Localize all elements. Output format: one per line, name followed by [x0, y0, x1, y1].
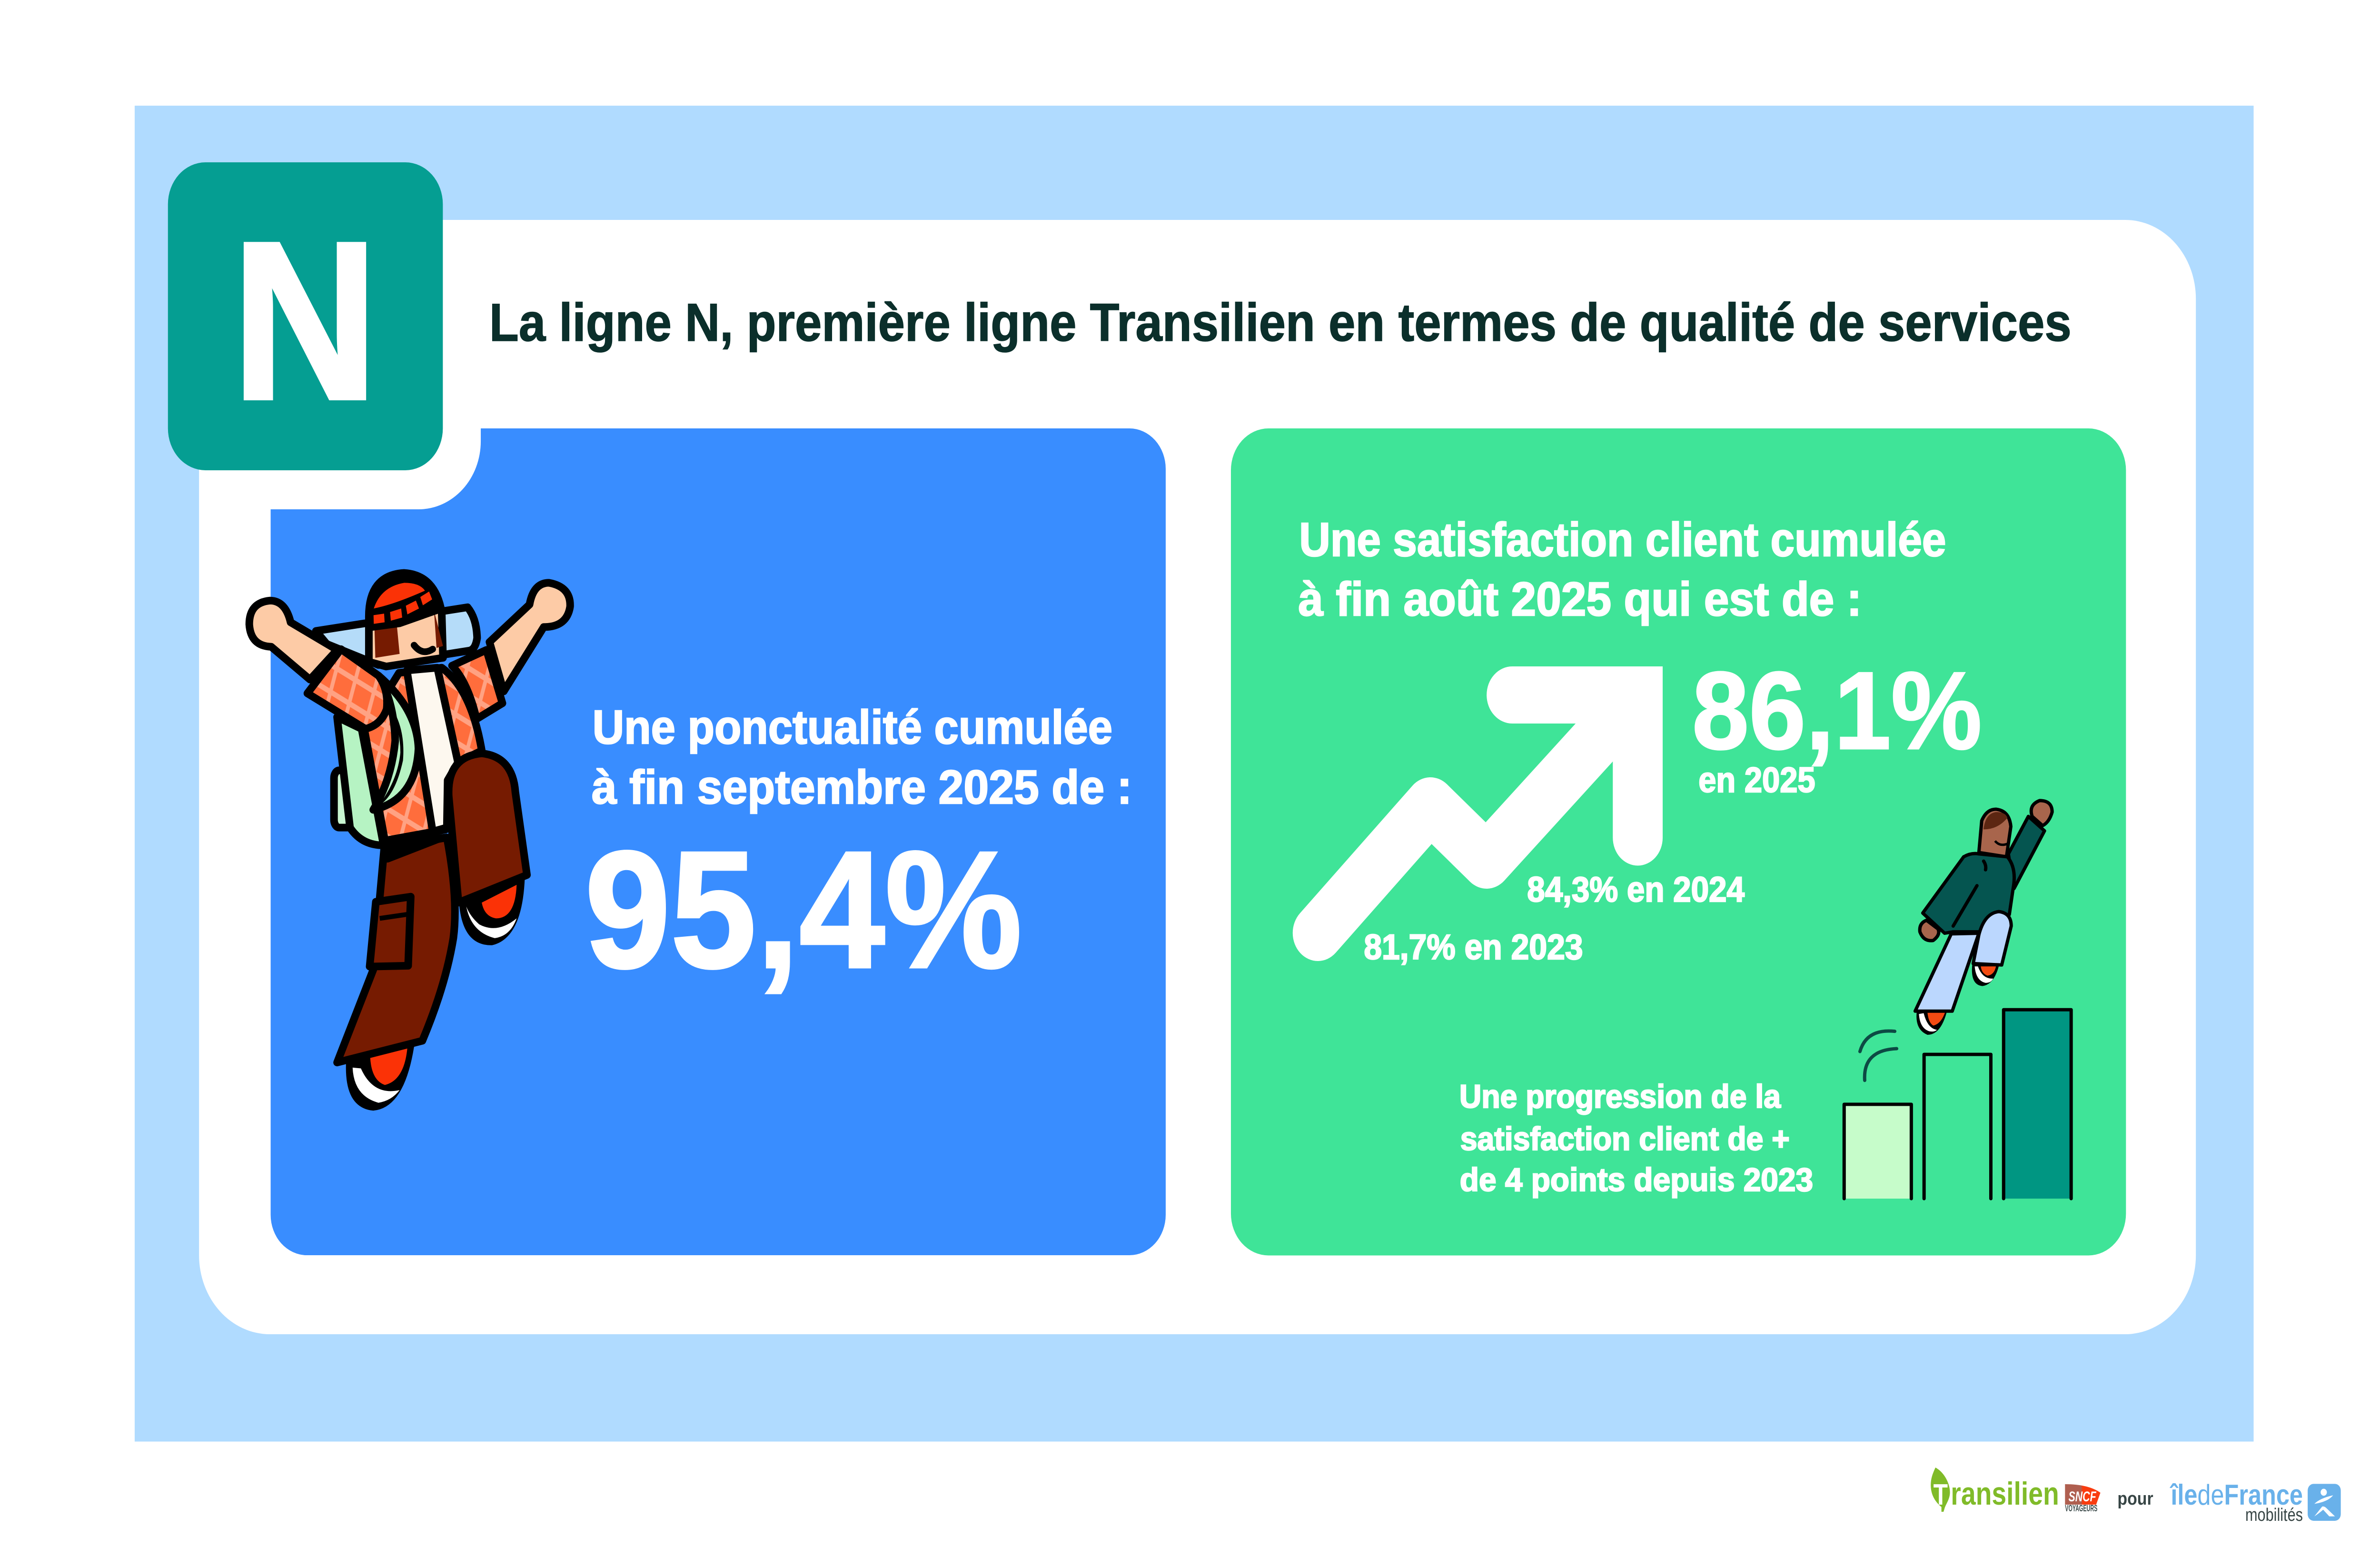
bar 2023 [1844, 1104, 1911, 1199]
backpack strap [373, 675, 418, 810]
strap shadow [378, 707, 403, 806]
motion lines [1860, 1031, 1897, 1081]
icon: rising arrow [1318, 666, 1663, 933]
satisfaction heading [1298, 513, 1946, 626]
raised knee [448, 754, 527, 902]
value 2025: 86,1% [1692, 649, 1982, 773]
leaf [1931, 1468, 1950, 1512]
logo: Île-de-France Mobilités [2170, 1479, 2341, 1525]
punctuality heading: à fin septembre 2025 de : [592, 761, 1132, 814]
text: pour: pour [2117, 1488, 2153, 1508]
left arm [249, 601, 337, 680]
logo: SNCF Voyageurs: SNCF [2068, 1489, 2096, 1505]
panel: punctuality [271, 428, 1166, 1255]
bar 2025 [2003, 1010, 2071, 1199]
head [1979, 809, 2011, 857]
rolled mat [316, 607, 477, 665]
backpack pocket [334, 770, 355, 828]
head [369, 573, 443, 666]
main leg [337, 837, 455, 1062]
progression text [1459, 1078, 1813, 1198]
logo: Transilien [1931, 1468, 2059, 1512]
right sleeve [452, 650, 503, 719]
mobilités: mobilités [2245, 1504, 2303, 1525]
logo: SNCF Voyageurs: VOYAGEURS [2065, 1503, 2097, 1513]
illustration: jumping traveller with backpack [249, 573, 570, 1111]
waistband [382, 833, 447, 863]
shoe upper [459, 875, 525, 945]
bar 2024 [1924, 1054, 1991, 1199]
white T: T [1934, 1478, 1948, 1511]
bar chart with jumper [1844, 801, 2071, 1199]
punctuality value: 95,4% [585, 817, 1022, 1003]
icon: runner [2308, 1484, 2341, 1521]
left sleeve [307, 649, 387, 729]
wordmark: îledeFrance [2170, 1479, 2303, 1511]
punctuality heading [592, 701, 1132, 814]
progression text: Une progression de la [1459, 1078, 1781, 1115]
logo: SNCF Voyageurs [2065, 1484, 2101, 1513]
shoe lower [1916, 1012, 1947, 1035]
wordmark: ransilien [1951, 1476, 2059, 1512]
right arm [489, 583, 570, 691]
line badge N: N [232, 195, 378, 446]
t-shirt [407, 668, 458, 832]
raised arm [2008, 801, 2052, 889]
progression text: satisfaction client de + [1460, 1121, 1790, 1157]
shirt [364, 668, 482, 841]
label 2025: en 2025 [1698, 760, 1815, 800]
progression text: de 4 points depuis 2023 [1460, 1161, 1813, 1198]
long leg [1915, 933, 1979, 1011]
line badge N [168, 162, 443, 470]
satisfaction heading: Une satisfaction client cumulée [1299, 513, 1946, 566]
label 2024: 84,3% en 2024 [1527, 870, 1745, 909]
satisfaction heading: à fin août 2025 qui est de : [1298, 573, 1862, 626]
label 2023: 81,7% en 2023 [1364, 927, 1583, 967]
backpack [337, 717, 384, 845]
jumper body [1923, 853, 2014, 933]
title: La ligne N, première ligne Transilien en termes de qualité de services [489, 293, 2072, 352]
white card [199, 220, 2196, 1334]
shoe upper [1972, 965, 1999, 986]
bent leg [1973, 912, 2011, 965]
cargo pocket [370, 897, 411, 967]
shoe lower [346, 1047, 414, 1111]
panel: satisfaction [1231, 428, 2126, 1256]
lower hand [1920, 920, 1939, 941]
punctuality heading: Une ponctualité cumulée [593, 701, 1112, 754]
background panel [135, 106, 2254, 1441]
